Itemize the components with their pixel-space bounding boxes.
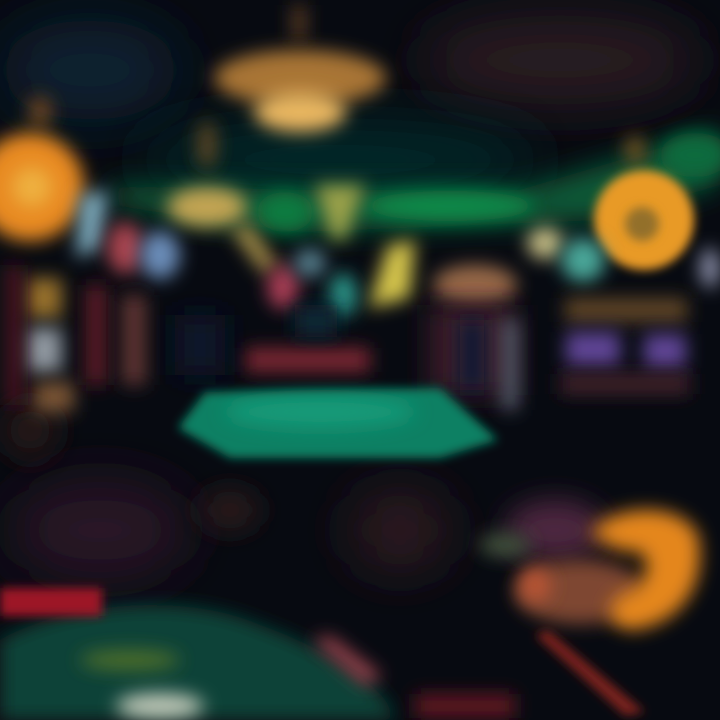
left orange wheel — [0, 96, 84, 241]
hanging lamps — [167, 121, 365, 272]
right orange wheel — [594, 136, 694, 270]
red stripes — [0, 588, 645, 718]
bottom-left green table — [0, 605, 395, 720]
seated figures around table — [175, 265, 518, 410]
right slot machines — [560, 298, 690, 394]
bottom-right orange chips pile — [479, 500, 700, 630]
green wall band — [110, 130, 720, 232]
colourful banners — [76, 190, 720, 317]
left figures and pillars — [6, 265, 146, 412]
ceiling lamp — [214, 5, 386, 132]
central green table — [178, 388, 498, 458]
